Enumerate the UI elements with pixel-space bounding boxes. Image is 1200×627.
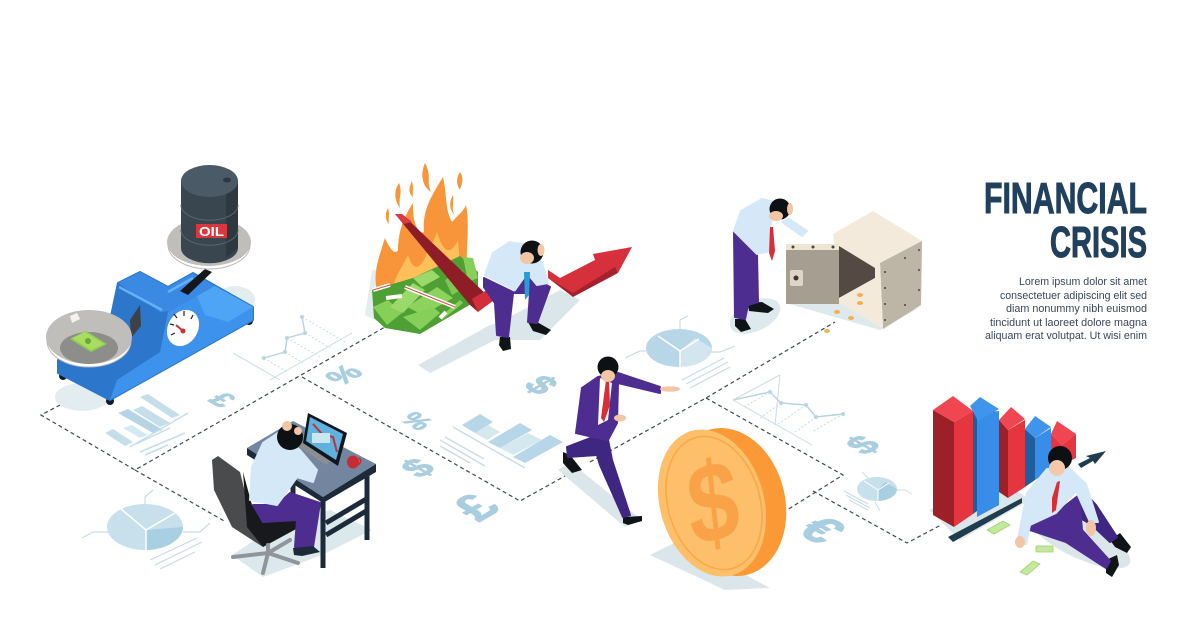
symbol: dollar lower: $	[391, 453, 444, 483]
body text: Lorem ipsum dolor sit amet	[1019, 276, 1148, 288]
upper plate	[167, 218, 251, 269]
seated man	[1015, 446, 1131, 577]
title	[984, 174, 1147, 267]
barrel label: OIL	[199, 224, 224, 239]
chart: right line chart	[733, 375, 845, 445]
office chair	[212, 456, 298, 573]
3D bar chart	[933, 396, 1076, 527]
head and hands	[277, 421, 303, 450]
illustration: running man	[558, 356, 680, 527]
illustration: man at open safe	[724, 198, 924, 341]
oil barrel	[181, 165, 238, 263]
body text: consectetuer adipiscing elit sed	[1000, 290, 1147, 302]
illustration: burning money and falling arrow	[365, 163, 632, 373]
dollar sign: $	[681, 434, 745, 570]
laptop	[293, 413, 347, 466]
dial gauge	[161, 304, 205, 352]
chart: left line chart	[233, 315, 352, 380]
symbol: percent centre: %	[394, 408, 440, 434]
flames	[376, 163, 468, 310]
dark axis arrow	[948, 451, 1106, 542]
trousers	[253, 493, 320, 547]
currency symbols	[202, 360, 889, 551]
shirt	[250, 433, 317, 505]
illustration: worker at desk	[212, 413, 376, 577]
illustration: oil price scale	[46, 165, 255, 411]
symbol: pound large: £	[440, 486, 513, 528]
scale body	[58, 272, 253, 405]
standing man	[734, 198, 807, 332]
symbol: dollar upper: $	[515, 370, 568, 400]
symbol: pound left: £	[202, 388, 243, 412]
symbol: euro: €	[786, 509, 858, 551]
symbol: percent left: %	[319, 360, 370, 390]
arm to upper plate	[180, 269, 212, 295]
body text	[985, 276, 1148, 342]
body text: aliquam erat volutpat. Ut wisi enim	[985, 330, 1147, 342]
illustration: man sitting by bar chart	[929, 396, 1137, 580]
money pile	[372, 256, 478, 334]
shoe	[293, 546, 320, 556]
chart: left bar chart	[105, 394, 188, 455]
open safe	[786, 211, 922, 333]
chart: central bar chart	[440, 414, 563, 468]
desk	[247, 421, 376, 568]
chart: lower-left pie	[82, 490, 210, 569]
chart: central pie	[625, 316, 735, 388]
chart: right small pie	[844, 472, 912, 511]
dashed flow lines	[41, 322, 941, 543]
coffee cup	[347, 456, 361, 468]
seated man	[484, 240, 551, 351]
scattered banknotes	[987, 521, 1053, 575]
red arrow	[395, 214, 632, 312]
body text: diam nonummy nibh euismod	[1006, 303, 1147, 315]
symbol: dollar right: $	[836, 430, 889, 460]
illustration: gold dollar coin	[641, 416, 801, 590]
title line 2: CRISIS	[1050, 218, 1147, 267]
body text: tincidunt ut laoreet dolore magna	[990, 317, 1148, 329]
left weighing pan	[46, 310, 132, 367]
